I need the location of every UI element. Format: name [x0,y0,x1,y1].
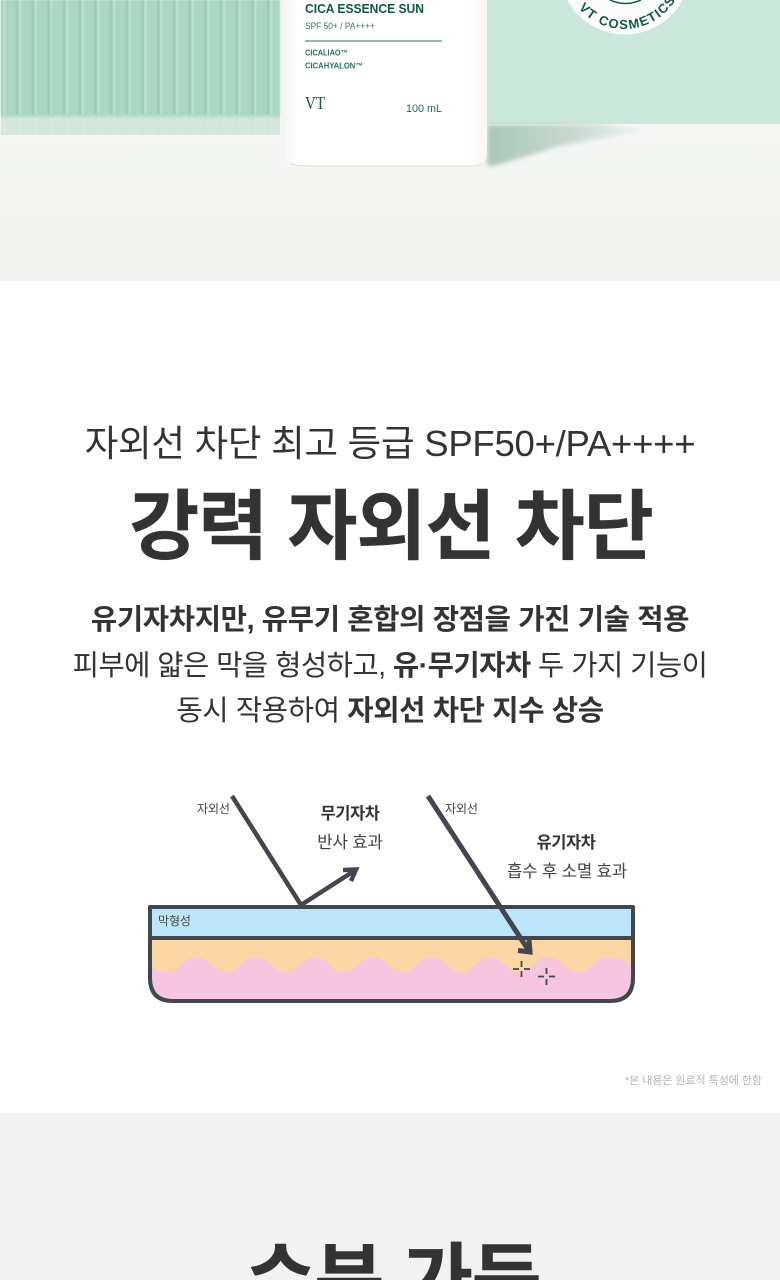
floor [0,124,780,281]
bottle: CICALIAO™ [305,48,348,58]
arrow: reflected UV [232,796,356,905]
bottle: VT [305,93,325,113]
label: inorganic: 반사 효과 [317,833,383,852]
label: organic [507,833,627,881]
description text: 유기자차지만, 유무기 혼합의 장점을 가진 기술 적용 [91,604,689,636]
bottle: CICAHYALON™ [305,62,363,70]
label: UV left: 자외선 [197,802,230,816]
label: organic: 흡수 후 소멸 효과 [507,862,627,881]
description text [73,604,707,727]
label: UV right: 자외선 [445,802,478,816]
bottle shadow [487,124,645,166]
skin layers [148,905,635,1003]
panel: next section [0,1113,780,1280]
footnote: *본 내용은 원료적 특성에 한함 [625,1075,762,1087]
subtitle: 자외선 차단 최고 등급 SPF50+/PA++++ [85,423,695,464]
bottle [282,0,487,166]
diagram: sunscreen layers [148,794,635,1003]
fluted glass panel [0,0,283,137]
label: film: 막형성 [158,914,191,928]
container outline [150,907,633,1001]
bottle label text: CICA ESSENCE SUN [305,1,424,16]
description text: 동시 작용하여 자외선 차단 지수 상승 [176,695,604,727]
label: inorganic: 무기자차 [320,804,380,823]
wall [0,0,780,125]
panel: product photo [0,0,780,281]
description text: 피부에 얇은 막을 형성하고, 유·무기자차 두 가지 기능이 [73,650,707,682]
label: organic: 유기자차 [536,833,596,852]
bottle: 100 mL [406,103,442,115]
bottle: SPF 50+ / PA++++ [305,21,375,31]
main heading: 강력 자외선 차단 [129,485,653,570]
label: inorganic [317,804,383,852]
icon: sparkles [513,961,555,985]
arrow: absorbed UV [428,796,530,952]
